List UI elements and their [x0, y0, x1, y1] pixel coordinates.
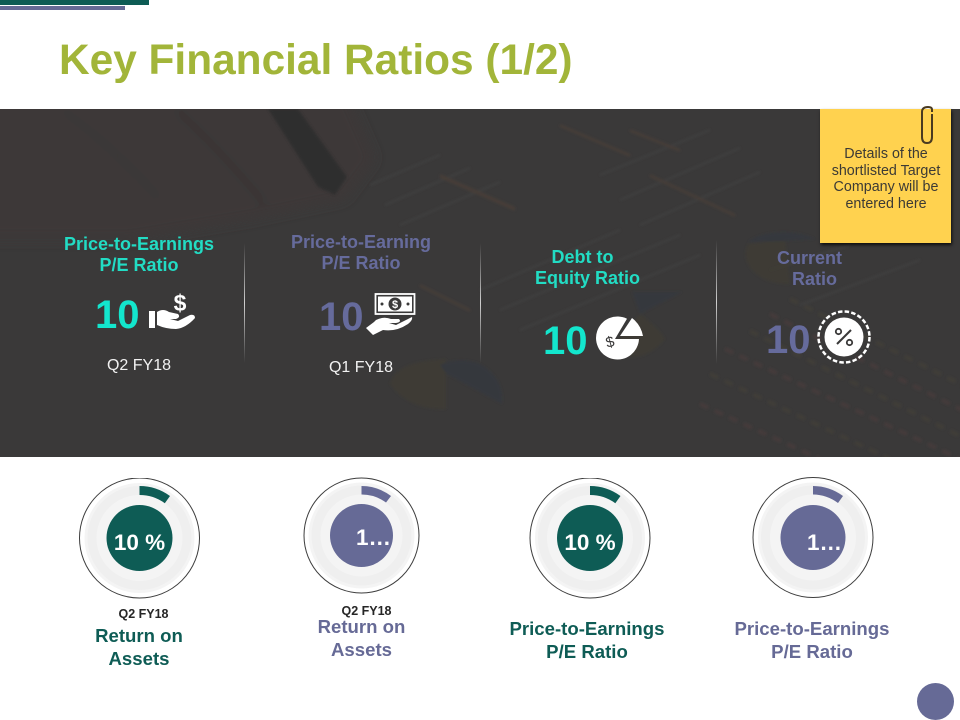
gauge 3 label: P/E Ratio: [546, 641, 628, 662]
gauge 1: return on assets Q2: 10 %: [114, 530, 165, 555]
KPI 2 label: Price-to-Earning: [291, 232, 431, 252]
KPI 1: price-to-earnings Q2: [64, 234, 214, 374]
gauge 3: price-to-earnings: 10 %: [564, 530, 616, 555]
KPI 2 period: Q1 FY18: [329, 359, 393, 376]
KPI 4 label: Ratio: [792, 269, 837, 289]
gauge 2: return on assets Q2: 1…: [356, 525, 391, 550]
KPI 1 label: [64, 234, 214, 275]
gauge 1 period: Q2 FY18: [118, 607, 169, 621]
KPI 1 label: Price-to-Earnings: [64, 234, 214, 254]
gauge 4 label: P/E Ratio: [771, 641, 853, 662]
KPI 3 label: Equity Ratio: [535, 268, 640, 288]
icon: pie chart with dollar: [596, 316, 643, 360]
sticky note text: shortlisted Target: [832, 163, 940, 179]
KPI 2 label: P/E Ratio: [321, 253, 400, 273]
gauge 1: return on assets Q2: [79, 478, 200, 669]
sticky note text: [832, 146, 940, 212]
KPI 3 label: [535, 247, 640, 288]
dividers: [244, 243, 245, 363]
KPI 1 period: Q2 FY18: [107, 357, 171, 374]
icon: hand with banknote: $: [392, 299, 398, 311]
gauge 2 label: [318, 616, 405, 660]
corner dot: [917, 682, 954, 720]
title: Key Financial Ratios (1/2): [59, 36, 573, 83]
KPI 4 label: Current: [777, 248, 842, 268]
KPI 2 value: 10: [319, 295, 364, 339]
gauge 4: price-to-earnings: [735, 477, 889, 662]
icon: pie chart with dollar: $: [604, 333, 617, 352]
KPI 1 label: P/E Ratio: [99, 255, 178, 275]
gauge 3 label: Price-to-Earnings: [510, 618, 664, 639]
KPI 2: price-to-earning Q1: [291, 232, 431, 376]
icon: percent badge: [817, 310, 871, 364]
KPI 4: current ratio: [766, 248, 871, 364]
KPI 3: debt to equity: [535, 247, 643, 363]
gauge 1 label: Return on: [95, 625, 183, 646]
sticky note text: Details of the: [844, 146, 928, 162]
gauge 2 label: Return on: [318, 616, 405, 637]
gauge 2 label: Assets: [331, 639, 392, 660]
sticky note text: Company will be: [834, 179, 938, 195]
KPI 2 label: [291, 232, 431, 273]
KPI 4 value: 10: [766, 318, 810, 362]
gauge 4: price-to-earnings: 1…: [807, 530, 842, 555]
gauge 1 label: Assets: [109, 648, 169, 669]
gauge 3 label: [510, 618, 664, 662]
icon: paper clip: [921, 106, 933, 144]
icon: hand with banknote: [366, 293, 416, 335]
KPI 1 value: 10: [95, 293, 140, 337]
dark photo panel: [0, 109, 960, 457]
sticky note text: entered here: [845, 196, 927, 212]
sticky note: [820, 106, 954, 246]
icon: hand with dollar: [149, 292, 195, 329]
gauge 2: return on assets Q2: [304, 478, 420, 660]
gauge 3: price-to-earnings: [510, 478, 664, 662]
gauge 4 label: Price-to-Earnings: [735, 618, 889, 639]
gauge 1 label: [95, 625, 183, 669]
top accent bars: [0, 0, 149, 10]
KPI 3 value: 10: [543, 319, 588, 363]
gauge 2 period: Q2 FY18: [341, 604, 392, 618]
KPI 3 label: Debt to: [551, 247, 613, 267]
gauge 4 label: [735, 618, 889, 662]
KPI 4 label: [777, 248, 842, 289]
